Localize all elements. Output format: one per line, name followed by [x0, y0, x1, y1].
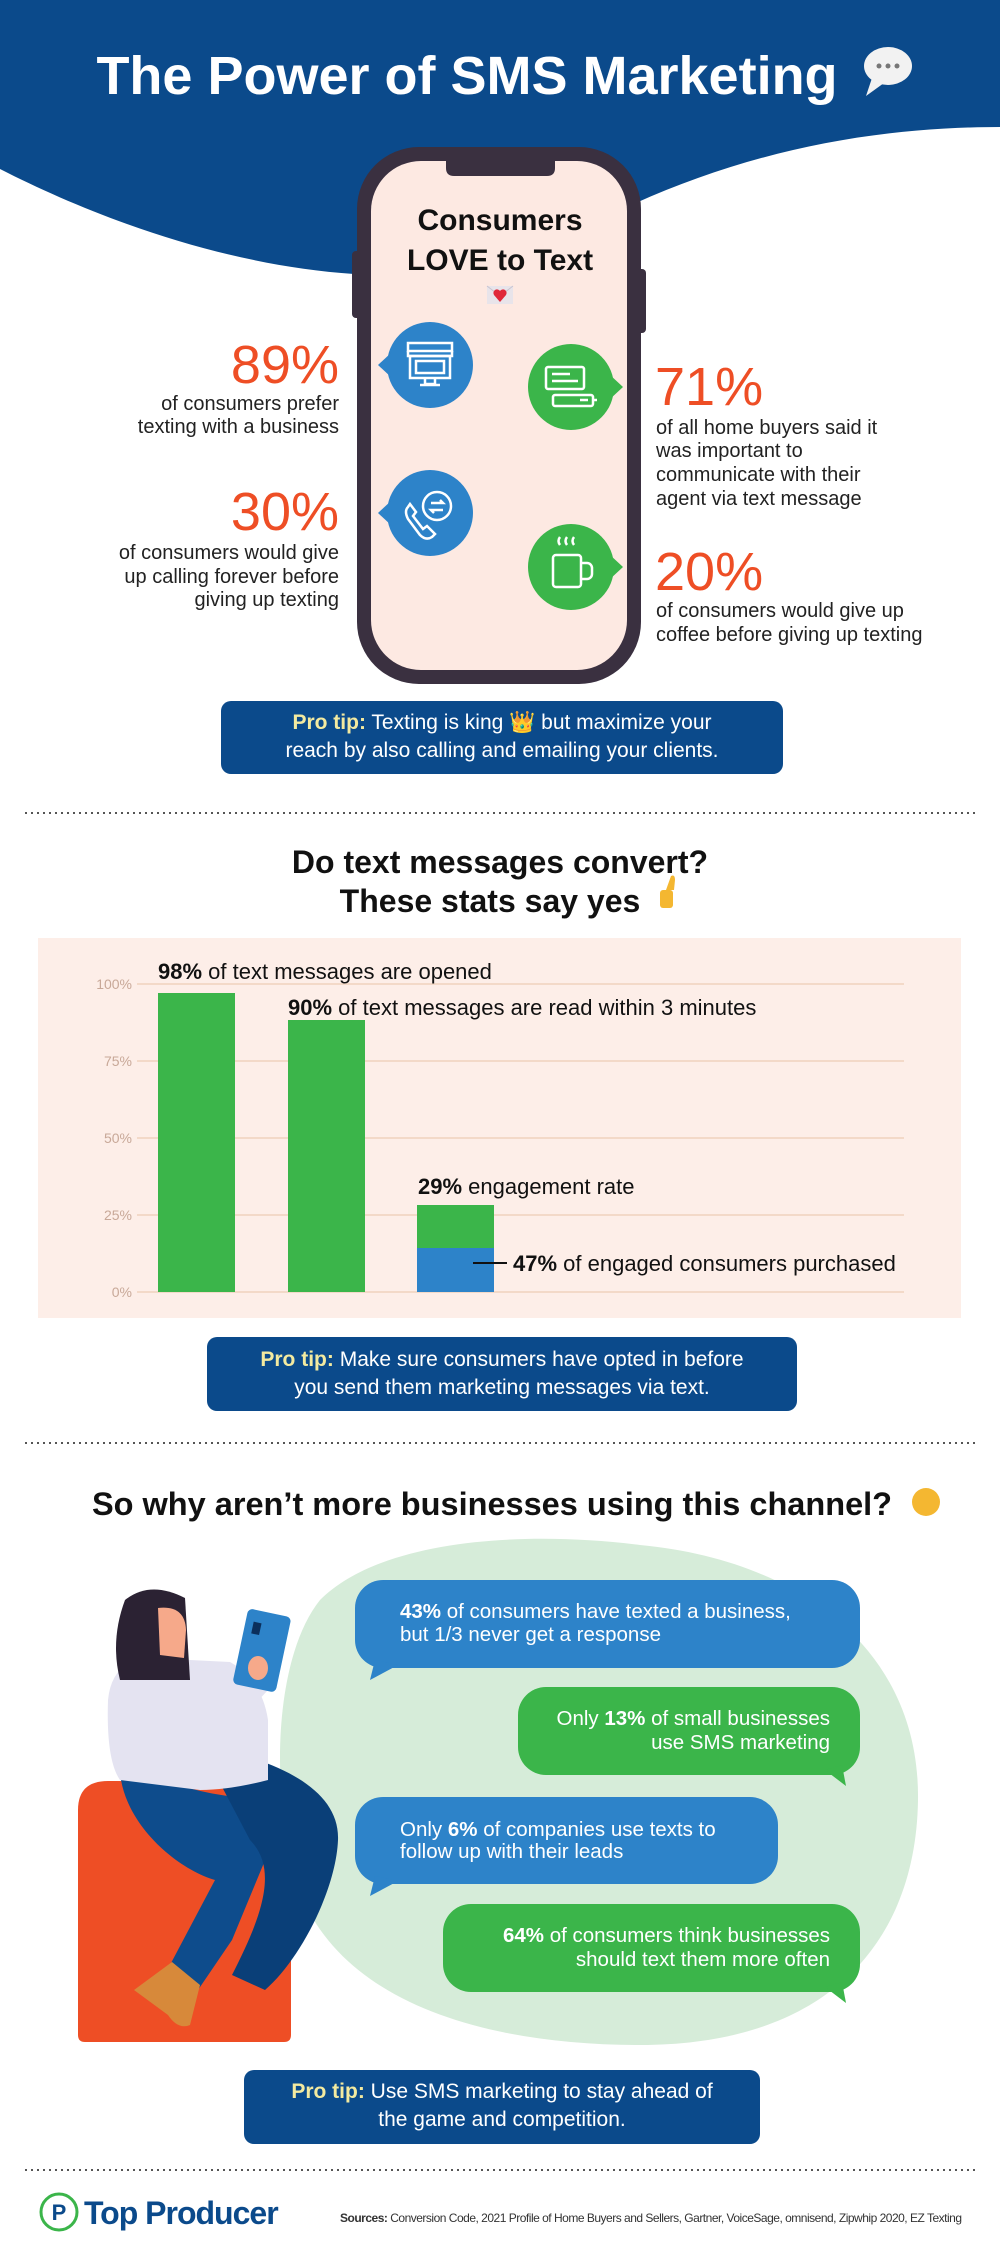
pro tip 1 — [221, 701, 783, 774]
stat: 89% — [138, 335, 339, 438]
bubble 1: 43% of consumers have texted a business, — [400, 1600, 791, 1623]
pro tip 2: you send them marketing messages via text. — [294, 1376, 710, 1399]
bubble 4: should text them more often — [576, 1948, 830, 1971]
pro tip 3 — [244, 2070, 760, 2144]
bubble 1 — [355, 1580, 860, 1680]
stat: 71%: agent via text message — [656, 488, 862, 510]
phone — [352, 147, 646, 684]
bubble 3: follow up with their leads — [400, 1840, 623, 1863]
bubble 1: but 1/3 never get a response — [400, 1623, 661, 1646]
pro tip 2: Pro tip: Make sure consumers have opted in before — [260, 1348, 744, 1371]
phone heading — [407, 204, 593, 277]
bar chart: 29% engagement rate — [418, 1174, 635, 1199]
logo: Top Producer: P — [52, 2200, 66, 2225]
bubble 4 — [443, 1904, 860, 2003]
sources: Sources: Conversion Code, 2021 Profile of Home Buyers and Sellers, Gartner, VoiceSage, omnisend, Zipwhip 2020, EZ Texting — [340, 2211, 962, 2225]
bar: 98% — [158, 993, 235, 1292]
icon: love letter — [487, 286, 513, 304]
pro tip 1: reach by also calling and emailing your clients. — [285, 739, 719, 762]
illustration: woman on seat — [78, 1589, 338, 2042]
icon: thinking face — [912, 1488, 940, 1516]
pro tip 3: Pro tip: Use SMS marketing to stay ahead of — [291, 2080, 713, 2103]
pro tip 1: Pro tip: Texting is king 👑 but maximize your — [292, 710, 712, 734]
section 2 heading — [292, 844, 708, 919]
stat: 71%: of all home buyers said it — [656, 417, 878, 439]
bubble 2: Only 13% of small businesses — [557, 1707, 830, 1730]
stat: 30%: giving up texting — [194, 589, 339, 611]
header wave background — [0, 0, 1000, 275]
stat: 30% — [119, 482, 339, 611]
stat: 71% — [655, 357, 878, 510]
stat: 30%: of consumers would give — [119, 542, 339, 564]
stat: 30%: 30% — [231, 482, 339, 542]
title: The Power of SMS Marketing — [96, 46, 838, 106]
bar chart: 100% — [96, 976, 132, 992]
green blob background — [280, 1539, 918, 2045]
bar chart: 50% — [104, 1130, 132, 1146]
bubble 2 — [518, 1687, 860, 1786]
bubble 3: Only 6% of companies use texts to — [400, 1818, 716, 1841]
icon: speech bubble emoji — [864, 47, 912, 96]
stat: 20%: of consumers would give up — [656, 600, 904, 622]
icon: thumbs up — [660, 876, 675, 908]
section 3 heading: So why aren’t more businesses using this channel? — [92, 1486, 892, 1522]
bar chart: 75% — [104, 1053, 132, 1069]
bubble 3 — [355, 1797, 778, 1896]
stat: 71%: 71% — [655, 357, 763, 417]
stat: 89%: of consumers prefer — [161, 393, 339, 415]
stat: 30%: up calling forever before — [124, 566, 339, 588]
bar chart: 25% — [104, 1207, 132, 1223]
bar: 29% stacked — [417, 1205, 494, 1292]
stat: 89%: 89% — [231, 335, 339, 395]
icon: storefront — [378, 322, 473, 408]
stat: 71%: was important to — [655, 440, 803, 462]
phone heading: LOVE to Text — [407, 244, 593, 277]
bar chart: 90% of text messages are read within 3 minutes — [288, 995, 756, 1020]
logo: Top Producer: Top Producer — [84, 2195, 278, 2231]
pro tip 2 — [207, 1337, 797, 1411]
section 2 heading: These stats say yes — [340, 883, 640, 919]
bubble 4: 64% of consumers think businesses — [503, 1924, 830, 1947]
bar chart: 0% — [112, 1284, 132, 1300]
bar chart: 47% of engaged consumers purchased — [513, 1251, 896, 1276]
icon: coffee mug — [528, 524, 623, 610]
icon: phone call — [378, 470, 473, 556]
stat: 20% — [655, 542, 922, 646]
phone heading: Consumers — [417, 204, 583, 237]
stat: 20%: 20% — [655, 542, 763, 602]
section 2 heading: Do text messages convert? — [292, 844, 708, 880]
pro tip 3: the game and competition. — [378, 2108, 626, 2131]
bar chart — [38, 938, 961, 1318]
icon: chat messages — [528, 344, 623, 430]
bubble 2: use SMS marketing — [651, 1731, 830, 1754]
stat: 89%: texting with a business — [138, 416, 339, 438]
stat: 71%: communicate with their — [656, 464, 861, 486]
stat: 20%: coffee before giving up texting — [656, 624, 922, 646]
bar chart: 98% of text messages are opened — [158, 959, 492, 984]
bar: 90% — [288, 1020, 365, 1292]
